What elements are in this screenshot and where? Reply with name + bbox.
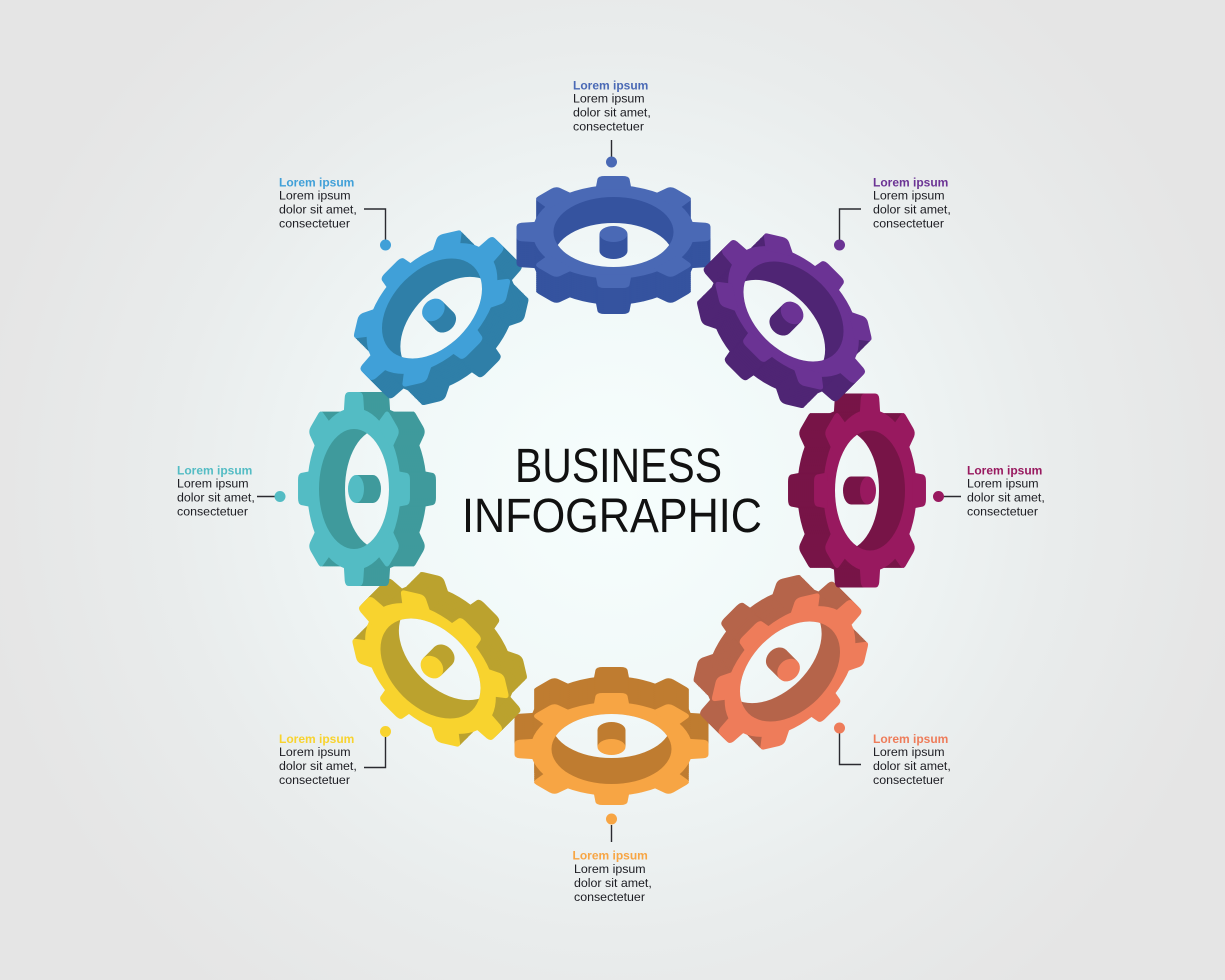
callout: left (teal): consectetuer <box>177 504 248 518</box>
callout: top (blue) <box>573 78 651 168</box>
callout: upper right (purple): dolor sit amet, <box>873 202 951 216</box>
callout: right (magenta): Lorem ipsum <box>967 476 1039 490</box>
callout: lower right (coral): Lorem ipsum <box>873 745 945 759</box>
callout: left (teal): dolor sit amet, <box>177 490 255 504</box>
callout: lower right (coral): dolor sit amet, <box>873 759 951 773</box>
callout: upper left (light blue): Lorem ipsum <box>279 188 351 202</box>
title <box>462 440 762 543</box>
callout: upper right (purple): Lorem ipsum <box>873 188 945 202</box>
callout: right (magenta): consectetuer <box>967 504 1038 518</box>
gear: orange (bottom) <box>514 667 708 805</box>
callout: lower left (yellow): consectetuer <box>279 773 350 787</box>
callout: top (blue): consectetuer <box>573 120 644 134</box>
callout: lower right (coral) <box>834 722 951 787</box>
callout: upper right (purple): Lorem ipsum <box>873 176 948 190</box>
callout: upper right (purple): consectetuer <box>873 216 944 230</box>
callout: lower left (yellow): Lorem ipsum <box>279 732 354 746</box>
gear: blue (top) <box>516 176 710 314</box>
callout: left (teal): Lorem ipsum <box>177 476 249 490</box>
callout: right (magenta): dolor sit amet, <box>967 490 1045 504</box>
callout: upper left (light blue): consectetuer <box>279 216 350 230</box>
callout: upper left (light blue) <box>279 176 391 250</box>
callout: bottom (orange): consectetuer <box>574 890 645 904</box>
callout: lower left (yellow): dolor sit amet, <box>279 759 357 773</box>
callout: top (blue): Lorem ipsum <box>573 78 648 92</box>
callout: lower left (yellow) <box>279 726 391 787</box>
callout: bottom (orange): Lorem ipsum <box>572 848 648 862</box>
title: INFOGRAPHIC <box>462 490 762 543</box>
callout: upper left (light blue): dolor sit amet, <box>279 202 357 216</box>
gear: teal (left) <box>298 392 436 586</box>
callout: bottom (orange): dolor sit amet, <box>574 876 652 890</box>
callout: right (magenta) <box>933 464 1045 518</box>
callout: top (blue): dolor sit amet, <box>573 106 651 120</box>
callout: upper left (light blue): Lorem ipsum <box>279 176 354 190</box>
callout: bottom (orange) <box>572 814 652 904</box>
callout: top (blue): Lorem ipsum <box>573 92 645 106</box>
gear: magenta (right) <box>788 394 926 588</box>
callout: upper right (purple) <box>834 176 951 250</box>
callout: lower left (yellow): Lorem ipsum <box>279 745 351 759</box>
title: BUSINESS <box>515 440 722 493</box>
callout: lower right (coral): consectetuer <box>873 773 944 787</box>
gear: coral (lower right) <box>694 575 868 750</box>
callout: left (teal): Lorem ipsum <box>177 464 252 478</box>
callout: bottom (orange): Lorem ipsum <box>574 862 646 876</box>
callout: right (magenta): Lorem ipsum <box>967 464 1042 478</box>
gear: yellow (lower left) <box>352 572 527 747</box>
callout: left (teal) <box>177 464 286 518</box>
gear: light blue (upper left) <box>354 230 528 405</box>
gear: purple (upper right) <box>697 233 872 408</box>
callout: lower right (coral): Lorem ipsum <box>873 732 948 746</box>
